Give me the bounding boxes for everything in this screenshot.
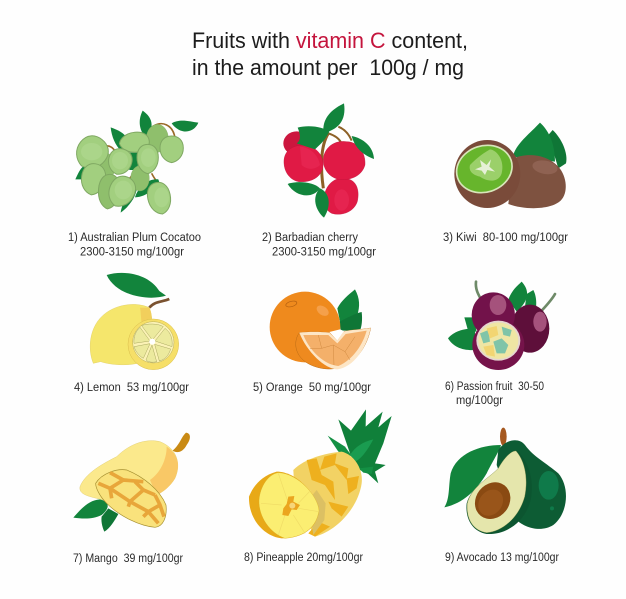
fruit 6: passion fruit [448,282,555,370]
label 3: 3) Kiwi 80-100 mg/100gr [443,232,568,244]
label 6: 6) Passion fruit 30-50 [445,381,544,393]
cherries [284,141,365,214]
label 1: 2300-3150 mg/100gr [80,246,184,258]
fruit 2: Barbadian cherry [283,103,374,218]
orange wedge [296,328,371,369]
seed [468,475,518,526]
label 2: 2300-3150 mg/100gr [272,246,376,258]
fruit 5: orange [270,289,371,369]
fruit 8: pineapple [249,409,392,538]
cut mango cheek [96,470,166,527]
pineapple body [293,452,362,537]
orange body [270,292,340,362]
label 4: 4) Lemon 53 mg/100gr [74,382,189,394]
label 8: 8) Pineapple 20mg/100gr [244,552,363,564]
leaves [337,289,362,331]
lemon slice [128,319,179,370]
label 7: 7) Mango 39 mg/100gr [73,553,183,565]
label 9: 9) Avocado 13 mg/100gr [445,552,559,564]
leaves [75,111,198,213]
label 6 [445,381,544,407]
label 1: 1) Australian Plum Cocatoo [68,232,201,244]
fruit 1: Australian plum [69,111,198,216]
label 2: 2) Barbadian cherry [262,232,358,244]
title: Fruits with vitamin C content, [192,28,468,53]
leaf [107,273,166,298]
label 5: 5) Orange 50 mg/100gr [253,382,371,394]
stem [500,428,507,446]
stems [322,127,352,188]
stem [149,299,169,308]
fruit 7: mango [73,433,190,532]
leaf [444,445,501,507]
stem [173,433,190,452]
leaves [73,499,118,532]
back fruits [511,305,549,353]
stems [476,282,555,311]
title [192,28,468,80]
plums [95,124,168,191]
fruit 3: kiwi [449,123,566,208]
mango body [80,441,178,500]
leaves [513,123,566,168]
back cherry [283,131,310,155]
cut kiwi [454,140,520,208]
title: in the amount per 100g / mg [192,55,464,80]
fruit 9: avocado [444,428,566,534]
crown [328,409,392,483]
whole kiwi [508,155,566,208]
whole avocado [497,440,566,529]
label 6: mg/100gr [456,395,503,407]
leaves [288,103,374,218]
pineapple slice [249,472,318,538]
fruit 4: lemon [90,273,179,370]
cut half [466,451,532,534]
label 1 [68,232,201,258]
leaves [448,282,536,350]
lemon body [90,304,152,365]
stems [98,124,175,186]
label 2 [262,232,376,258]
cut fruit [472,320,524,370]
